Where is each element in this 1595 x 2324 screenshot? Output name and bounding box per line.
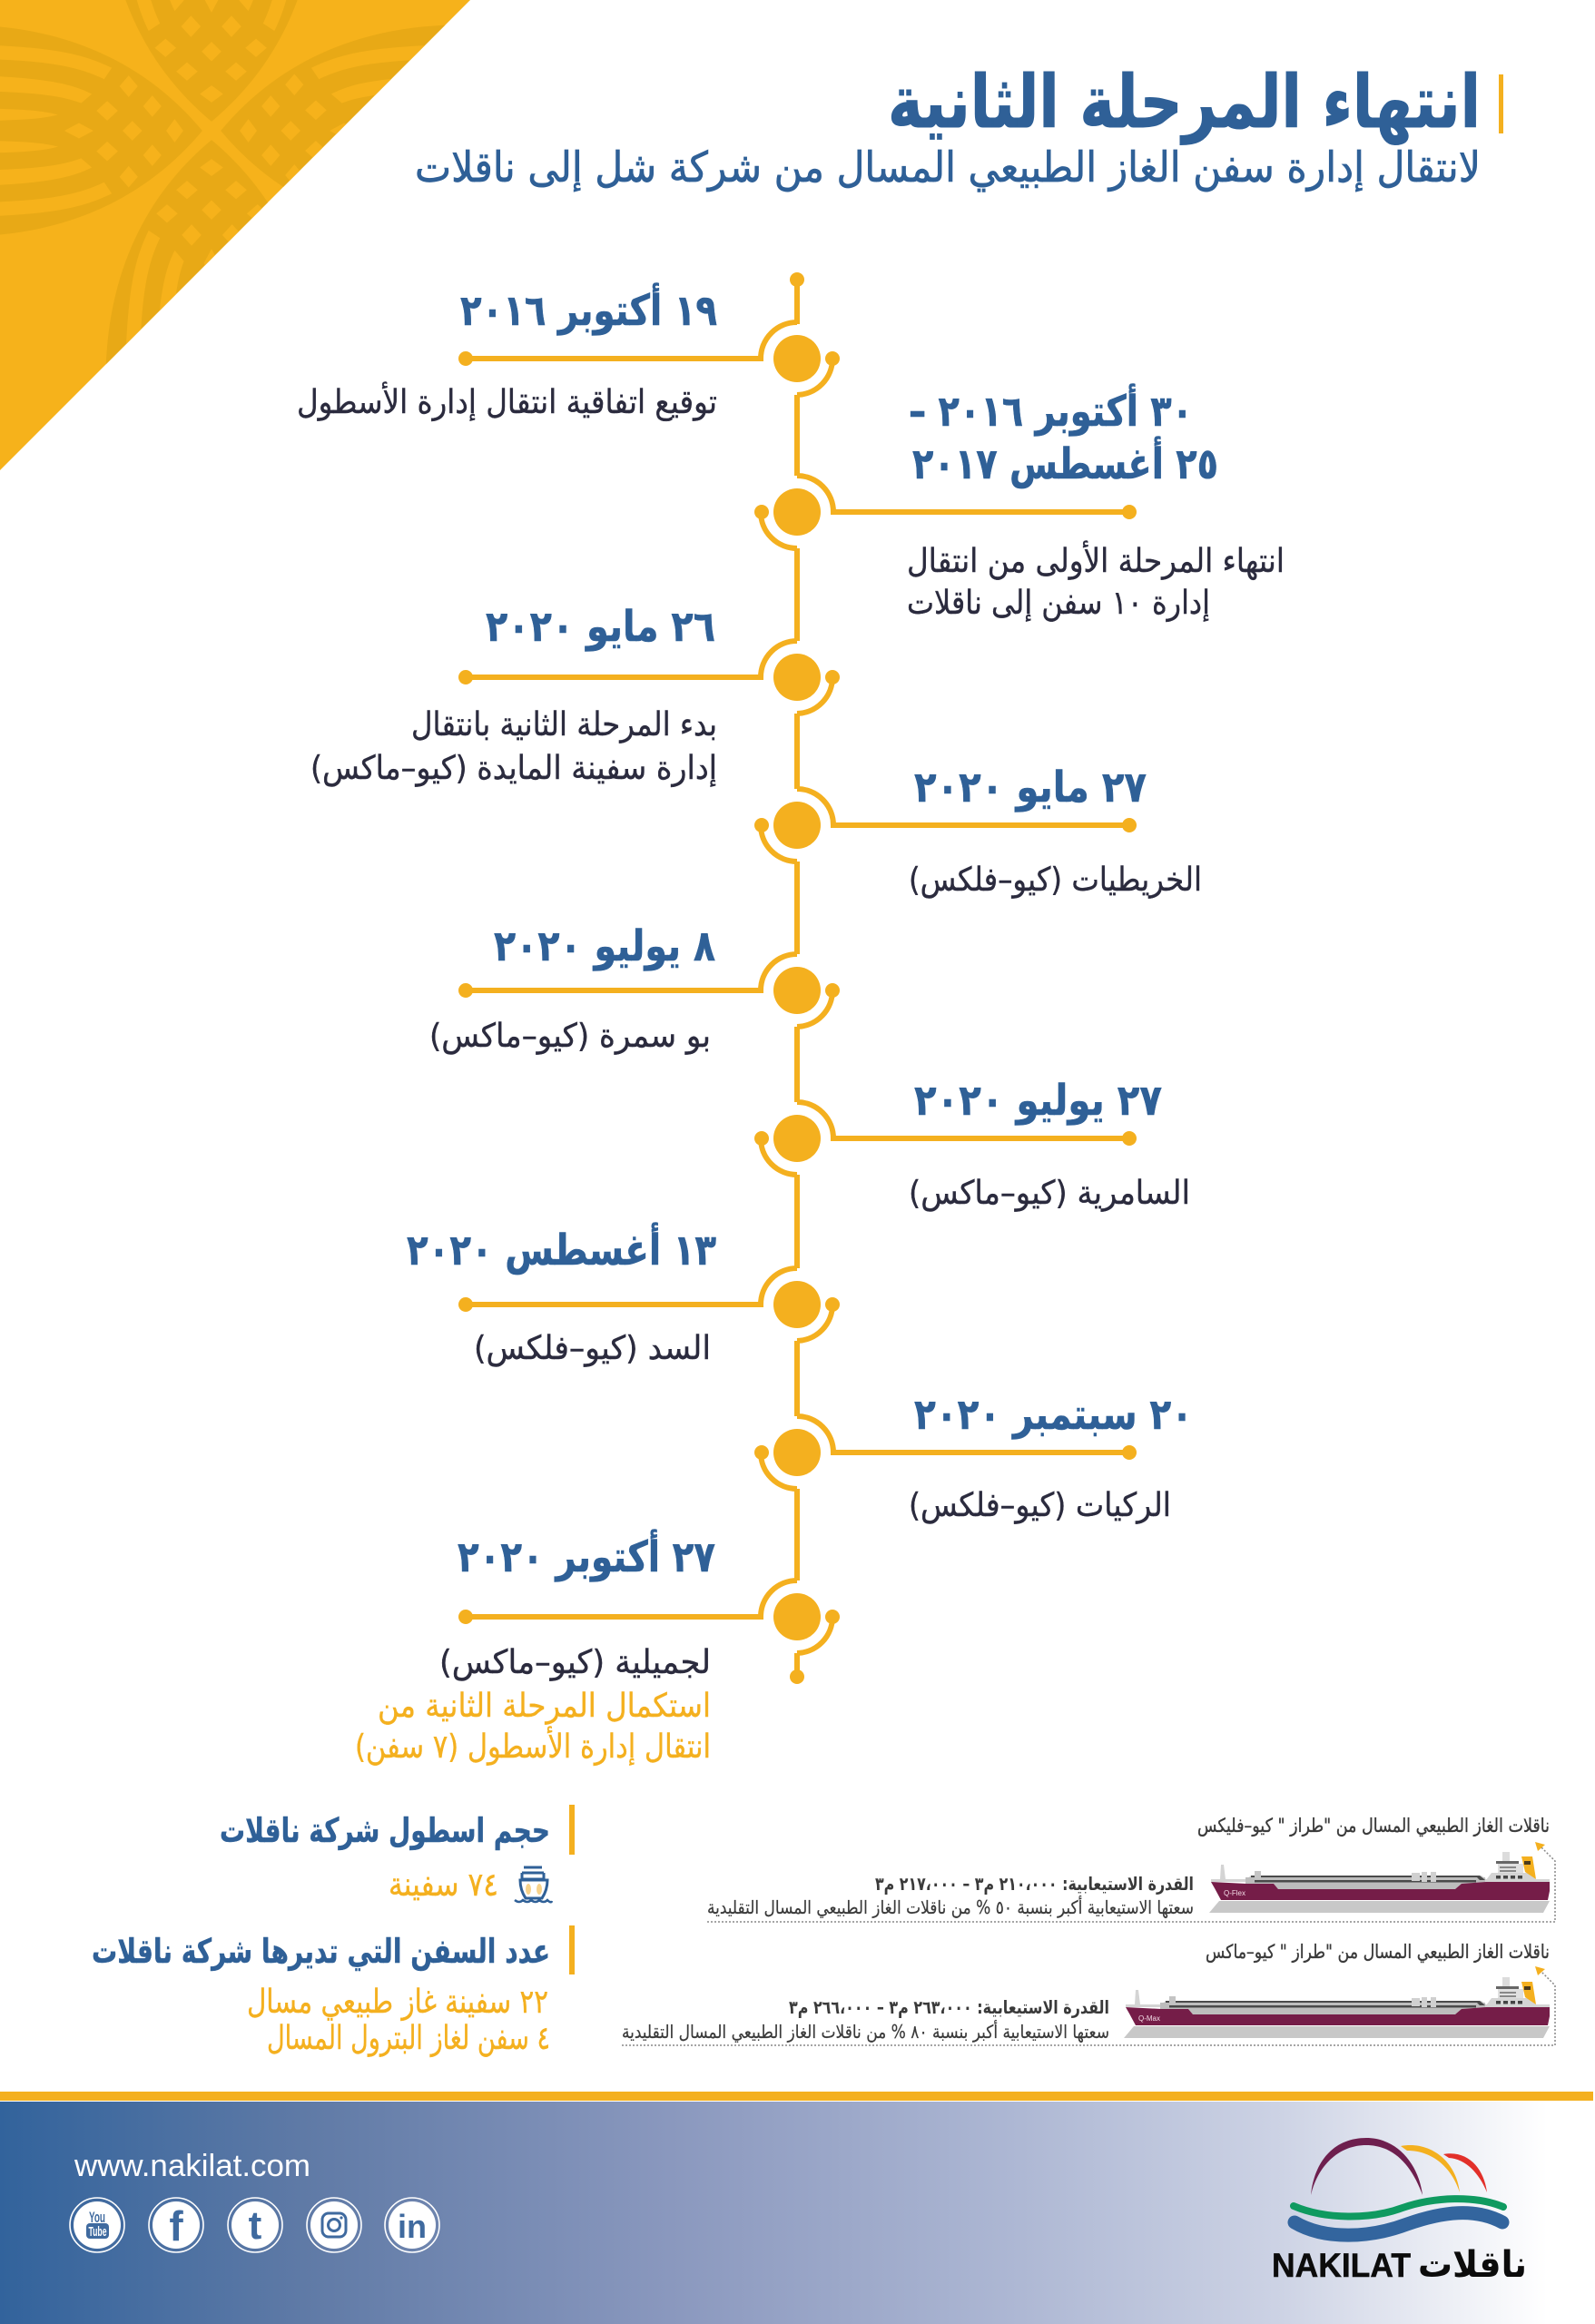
timeline entry 3 — [310, 602, 717, 787]
timeline entry 2: انتهاء المرحلة الأولى من انتقال — [907, 540, 1285, 580]
timeline entry 2 — [907, 383, 1285, 622]
panel: ships managed: ٤ سفن لغاز البترول المسال — [267, 2020, 550, 2057]
timeline entry 7 — [407, 1222, 716, 1367]
panel: fleet size: ٧٤ سفينة — [389, 1866, 498, 1904]
timeline entry 4 — [909, 763, 1202, 899]
panel: fleet size — [220, 1805, 575, 1904]
node 3 — [458, 641, 840, 714]
timeline spine and nodes — [458, 272, 1137, 1684]
timeline entry 1: ١٩ أكتوبر ٢٠١٦ — [460, 282, 717, 336]
icon: youtube: Tube — [89, 2224, 107, 2240]
timeline entry 9: لجميلية (كيو–ماكس) — [439, 1644, 711, 1681]
timeline entry 9: ٢٧ أكتوبر ٢٠٢٠ — [458, 1529, 715, 1582]
node 2 — [754, 476, 1137, 548]
title: انتهاء المرحلة الثانية — [888, 60, 1481, 145]
timeline entry 5: ٨ يوليو ٢٠٢٠ — [494, 921, 715, 971]
node 8 — [754, 1416, 1137, 1489]
timeline entry 9: انتقال إدارة الأسطول (٧ سفن) — [355, 1726, 711, 1766]
timeline entry 1: توقيع اتفاقية انتقال إدارة الأسطول — [297, 381, 717, 421]
subtitle: لانتقال إدارة سفن الغاز الطبيعي المسال من شركة شل إلى ناقلات — [415, 143, 1481, 192]
ship: Q-Max: Q-Max — [1138, 2014, 1160, 2023]
timeline entry 9: استكمال المرحلة الثانية من — [378, 1688, 711, 1725]
node 7 — [458, 1268, 840, 1341]
icon: youtube — [70, 2198, 124, 2252]
timeline entry 2: ٣٠ أكتوبر ٢٠١٦ – — [909, 383, 1193, 437]
node 6 — [754, 1102, 1137, 1175]
panel: ships managed — [92, 1925, 575, 2057]
timeline entry 8: الركيات (كيو–فلكس) — [909, 1487, 1171, 1524]
logo: Nakilat: ناقلات — [1418, 2244, 1527, 2286]
timeline entry 5: بو سمرة (كيو–ماكس) — [429, 1018, 711, 1055]
panel: Q-Max carrier — [622, 1941, 1555, 2045]
timeline entry 9 — [355, 1529, 715, 1766]
ship: Q-Flex: Q-Flex — [1224, 1889, 1245, 1897]
node 5 — [458, 954, 840, 1027]
timeline entry 8: ٢٠ سبتمبر ٢٠٢٠ — [914, 1390, 1193, 1440]
logo: Nakilat: NAKILAT — [1272, 2247, 1411, 2284]
timeline entry 3: بدء المرحلة الثانية بانتقال — [411, 706, 717, 743]
social icons — [70, 2198, 439, 2252]
ship: Q-Flex — [1209, 1852, 1550, 1913]
timeline entry 4: الخريطيات (كيو–فلكس) — [909, 862, 1202, 899]
icon: linkedin: in — [398, 2208, 427, 2245]
panel: Q-Flex carrier — [707, 1815, 1555, 1922]
timeline entry 5 — [429, 921, 715, 1055]
icon: tumblr: t — [249, 2203, 262, 2248]
node 9 — [458, 1581, 840, 1653]
ship: Q-Max — [1124, 1977, 1550, 2038]
icon: tumblr — [228, 2198, 282, 2252]
icon: instagram — [307, 2198, 361, 2252]
panel: Q-Flex carrier: القدرة الاستيعابية: ٢١٠،٠٠٠ م٣ – ٢١٧،٠٠٠ م٣ — [875, 1873, 1194, 1895]
icon: linkedin — [385, 2198, 439, 2252]
timeline entry 1 — [297, 282, 717, 421]
panel: ships managed: عدد السفن التي تديرها شركة ناقلات — [92, 1932, 550, 1971]
node 1 — [458, 322, 840, 395]
timeline entry 3: إدارة سفينة المايدة (كيو–ماكس) — [310, 750, 717, 787]
decorative corner triangle — [0, 0, 470, 470]
panel: fleet size: حجم اسطول شركة ناقلات — [220, 1811, 550, 1850]
icon: facebook: f — [169, 2202, 183, 2250]
timeline entry 4: ٢٧ مايو ٢٠٢٠ — [914, 763, 1147, 812]
timeline entry 2: ٢٥ أغسطس ٢٠١٧ — [912, 436, 1218, 489]
timeline entry 6 — [909, 1076, 1190, 1212]
timeline entry 6: ٢٧ يوليو ٢٠٢٠ — [914, 1076, 1162, 1126]
timeline entry 7: ١٣ أغسطس ٢٠٢٠ — [407, 1222, 716, 1275]
panel: Q-Max carrier: سعتها الاستيعابية أكبر بنسبة ٨٠ % من ناقلات الغاز الطبيعي المسال التقليدية — [622, 2020, 1109, 2043]
footer band — [0, 2092, 1595, 2324]
website url: www.nakilat.com — [74, 2149, 310, 2183]
timeline entry 8 — [909, 1390, 1193, 1524]
panel: ships managed: ٢٢ سفينة غاز طبيعي مسال — [247, 1984, 548, 2021]
timeline entry 6: السامرية (كيو–ماكس) — [909, 1175, 1190, 1212]
icon: ship — [515, 1867, 552, 1902]
icon: youtube: You — [89, 2209, 105, 2226]
node 4 — [754, 789, 1137, 862]
logo: Nakilat — [1272, 2138, 1527, 2286]
panel: Q-Flex carrier: سعتها الاستيعابية أكبر بنسبة ٥٠ % من ناقلات الغاز الطبيعي المسال التقليدية — [707, 1896, 1194, 1919]
icon: facebook — [149, 2198, 203, 2252]
panel: Q-Max carrier: القدرة الاستيعابية: ٢٦٣،٠٠٠ م٣ – ٢٦٦،٠٠٠ م٣ — [789, 1996, 1109, 2018]
timeline entry 7: السد (كيو–فلكس) — [474, 1330, 711, 1367]
timeline entry 3: ٢٦ مايو ٢٠٢٠ — [486, 602, 715, 652]
timeline entry 2: إدارة ١٠ سفن إلى ناقلات — [907, 585, 1210, 622]
